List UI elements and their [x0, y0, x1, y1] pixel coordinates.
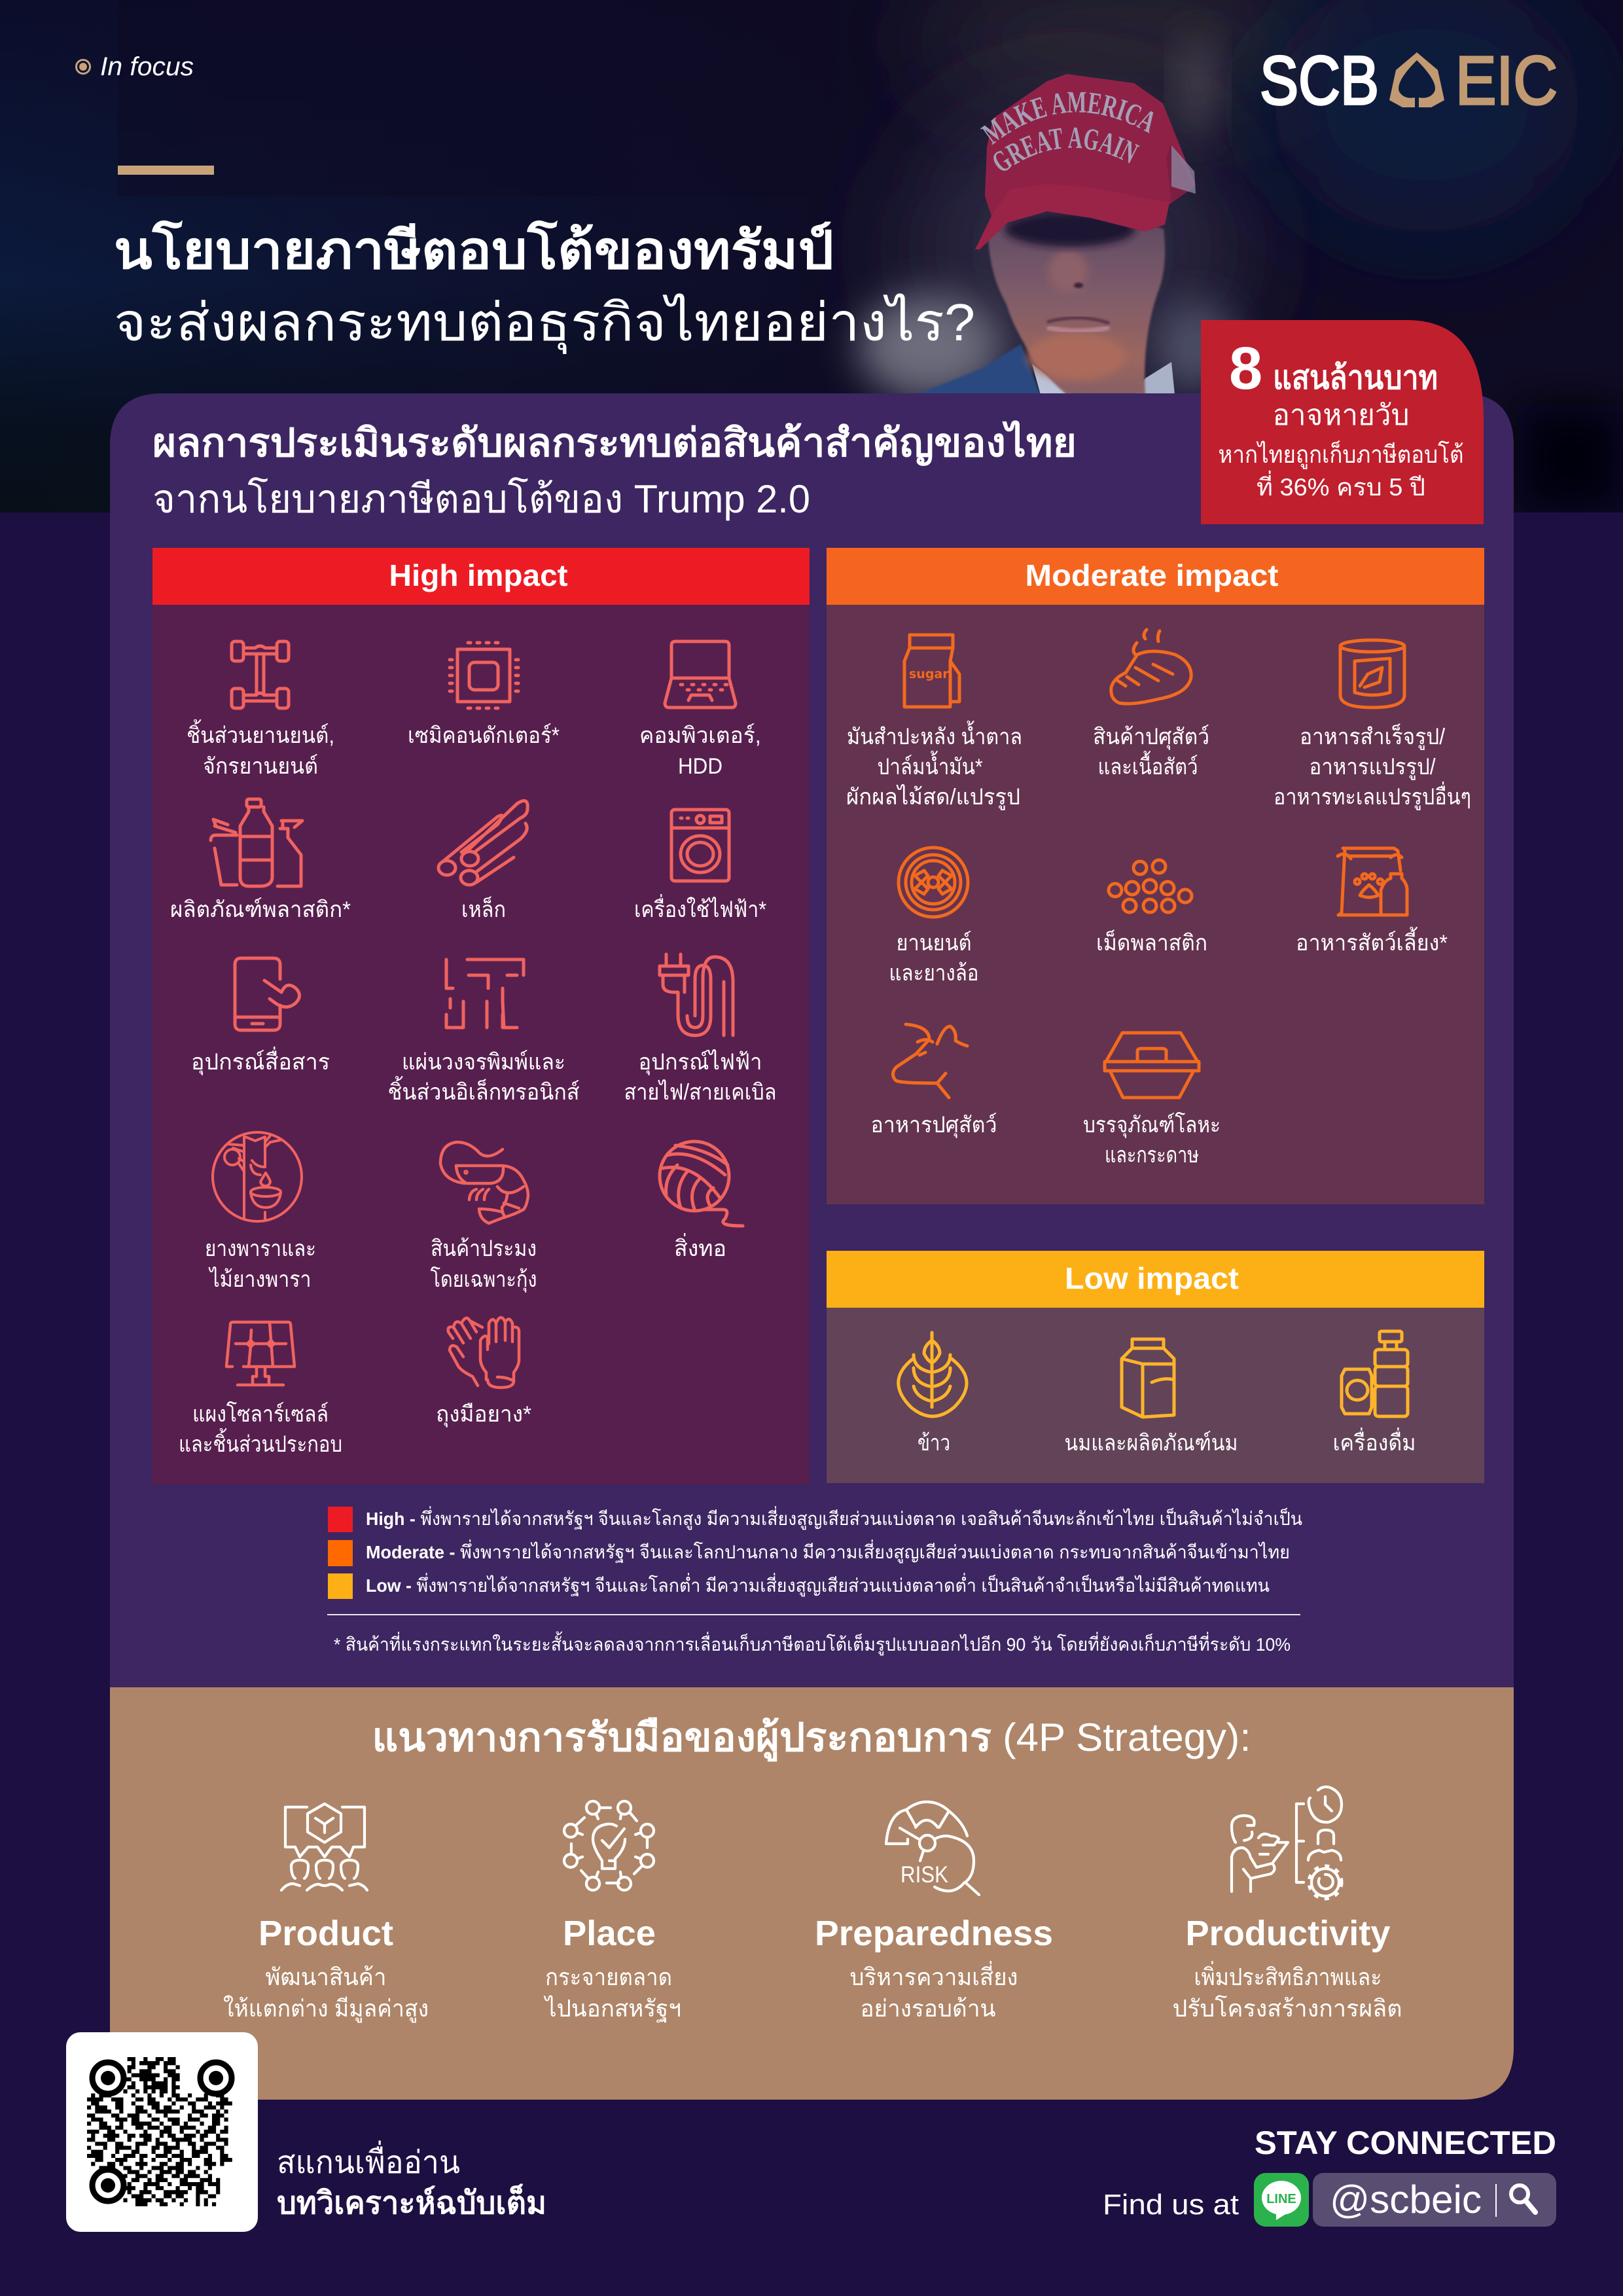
label: เซมิคอนดักเตอร์* — [408, 723, 560, 748]
label: แผ่นวงจรพิมพ์และ — [402, 1050, 565, 1075]
icon: steak — [1111, 630, 1191, 704]
logo: SCB EIC: EIC — [1455, 43, 1558, 119]
icon: steel pipes — [438, 801, 527, 885]
label: สินค้าปศุสัตว์ — [1093, 725, 1209, 750]
label — [889, 931, 979, 986]
title: จะส่งผลกระทบต่อธุรกิจไทยอย่างไร? — [114, 293, 975, 354]
label: Productivity: Productivity — [1186, 1914, 1390, 1953]
icon: beverages — [1342, 1331, 1408, 1416]
label: มันสำปะหลัง น้ำตาล — [847, 721, 1022, 749]
icon: milk carton — [1122, 1339, 1174, 1417]
legend swatch: moderate — [328, 1540, 353, 1566]
label: อาหารสำเร็จรูป/ — [1300, 723, 1446, 750]
icon: sugar bag: sugar — [909, 667, 949, 681]
panel: Low impact — [827, 1251, 1484, 1483]
header: Low impact — [827, 1251, 1484, 1308]
legend — [328, 1506, 1302, 1599]
icon: rubber tree — [213, 1132, 302, 1221]
label — [187, 719, 334, 779]
title: นโยบายภาษีตอบโต้ของทรัมป์ — [114, 219, 834, 279]
label — [205, 1236, 316, 1292]
callout: 8 แสนล้านบาท: ที่ 36% ครบ 5 ปี — [1257, 470, 1425, 501]
header: Low impact: Low impact — [1065, 1261, 1239, 1295]
label: ข้าว — [918, 1431, 950, 1456]
icon: canned food — [1340, 640, 1404, 708]
cap — [975, 74, 1196, 249]
header: High impact: High impact — [389, 558, 568, 592]
callout: 8 แสนล้านบาท: อาจหายวับ — [1272, 399, 1410, 431]
label: Preparedness: อย่างรอบด้าน — [860, 1995, 996, 2022]
label: อาหารสัตว์เลี้ยง* — [1296, 927, 1448, 956]
header: Moderate impact — [827, 548, 1484, 605]
label: สิ่งทอ — [674, 1233, 726, 1261]
icon: rice grain — [899, 1333, 967, 1416]
label: อุปกรณ์สื่อสาร — [191, 1047, 330, 1075]
label — [1093, 725, 1209, 780]
label: Place: Place — [563, 1914, 656, 1953]
legend swatch: high — [328, 1507, 353, 1532]
label: จักรยานยนต์ — [203, 754, 318, 779]
label: ชิ้นส่วนอิเล็กทรอนิกส์ — [387, 1076, 580, 1105]
icon: product — [281, 1804, 367, 1890]
label: Product: พัฒนาสินค้า — [266, 1964, 386, 1990]
label: Productivity: เพิ่มประสิทธิภาพและ — [1194, 1961, 1382, 1990]
legend text: high: High - พึ่งพารายได้จากสหรัฐฯ จีนและโลกสูง มีความเสี่ยงสูญเสียส่วนแบ่งตลาด เจอสินค้าจีนทะลักเข้าไทย เป็นสินค้าไม่จำเป็น — [366, 1506, 1302, 1530]
label — [179, 1401, 342, 1457]
label: และยางล้อ — [889, 961, 979, 986]
panel heading: จากนโยบายภาษีตอบโต้ของ Trump 2.0 — [152, 476, 810, 521]
icon: plastic products — [211, 799, 302, 886]
label: คอมพิวเตอร์, — [639, 723, 761, 748]
label — [1083, 1112, 1221, 1168]
label: Productivity: ปรับโครงสร้างการผลิต — [1173, 1995, 1402, 2022]
text: scan prompt: บทวิเคราะห์ฉบับเต็ม — [277, 2183, 546, 2221]
heading: 4P strategy: แนวทางการรับมือของผู้ประกอบการ (4P Strategy): — [372, 1715, 1251, 1762]
panel: High impact — [152, 548, 810, 1484]
text: scan prompt — [277, 2140, 546, 2221]
text: stay connected: STAY CONNECTED — [1255, 2125, 1556, 2161]
handle: @scbeic — [1313, 2173, 1556, 2227]
label: HDD — [678, 754, 722, 779]
handle: @scbeic: @scbeic — [1330, 2178, 1482, 2221]
label: อุปกรณ์ไฟฟ้า — [639, 1049, 762, 1075]
icon: semiconductor chip — [450, 643, 518, 708]
title — [114, 219, 975, 354]
label — [846, 721, 1022, 810]
icon: car chassis — [232, 641, 289, 708]
label: Place: ไปนอกสหรัฐฯ — [543, 1995, 681, 2023]
icon: preparedness: RISK — [901, 1862, 948, 1888]
panel: purple main — [110, 393, 1514, 1702]
label: Product: Product — [259, 1914, 393, 1953]
callout: 8 แสนล้านบาท: หากไทยถูกเก็บภาษีตอบโต้ — [1219, 439, 1463, 469]
icon: yarn ball — [660, 1141, 743, 1226]
legend text: low: Low - พึ่งพารายได้จากสหรัฐฯ จีนและโลกต่ำ มีความเสี่ยงสูญเสียส่วนแบ่งตลาดต่ำ เป็นสินค้าจำเป็นหรือไม่มีสินค้าทดแทน — [366, 1573, 1270, 1597]
icon: place — [564, 1801, 654, 1890]
label: เครื่องดื่ม — [1332, 1427, 1416, 1456]
label — [387, 1050, 580, 1105]
label: และกระดาษ — [1105, 1143, 1199, 1168]
label: Preparedness — [815, 1914, 1053, 2022]
panel heading: ผลการประเมินระดับผลกระทบต่อสินค้าสำคัญของไทย — [152, 420, 1077, 466]
label: Place: กระจายตลาด — [545, 1964, 672, 1990]
label: ปาล์มน้ำมัน* — [877, 751, 983, 780]
panel heading — [152, 420, 1077, 521]
callout: 8 แสนล้านบาท: แสนล้านบาท — [1273, 359, 1438, 396]
label: Place — [543, 1914, 681, 2023]
icon: plug and cable — [660, 954, 733, 1035]
face — [988, 212, 1165, 395]
label: และชิ้นส่วนประกอบ — [179, 1428, 342, 1457]
label: ผักผลไม้สด/แปรรูป — [846, 784, 1020, 810]
label: โดยเฉพาะกุ้ง — [431, 1266, 537, 1293]
label: ผลิตภัณฑ์พลาสติก* — [170, 897, 351, 922]
text: scan prompt: สแกนเพื่ออ่าน — [277, 2140, 460, 2180]
icon: circuit board traces — [446, 960, 524, 1028]
label: ชิ้นส่วนยานยนต์, — [187, 719, 334, 748]
icon: washing machine — [671, 810, 729, 881]
icon: solar panel — [226, 1322, 294, 1385]
icon: LINE — [1254, 2173, 1309, 2227]
icon: car tire — [899, 848, 968, 917]
callout: 8 แสนล้านบาท: 8 — [1229, 335, 1262, 402]
label: แผงโซลาร์เซลล์ — [192, 1401, 329, 1427]
icon: sugar bag — [904, 635, 959, 707]
label — [1274, 723, 1471, 810]
label: สายไฟ/สายเคเบิล — [624, 1079, 776, 1105]
icon: laptop — [665, 641, 736, 708]
label: สินค้าประมง — [431, 1236, 537, 1261]
footnote: * สินค้าที่แรงกระแทกในระยะสั้นจะลดลงจากการเลื่อนเก็บภาษีตอบโต้เต็มรูปแบบออกไปอีก 90 วัน โดยที่ยังคงเก็บภาษีที่ระดับ 10% — [334, 1631, 1291, 1656]
label: ไม้ยางพารา — [208, 1266, 312, 1292]
label: บรรจุภัณฑ์โลหะ — [1083, 1112, 1221, 1138]
cap: MAKE AMERICA — [980, 92, 1153, 145]
header: Moderate impact: Moderate impact — [1025, 558, 1279, 592]
icon: pet food — [1338, 848, 1407, 915]
icon: productivity — [1232, 1787, 1342, 1899]
icon: tablet with hand — [235, 958, 300, 1030]
header: High impact — [152, 548, 810, 605]
label: เหล็ก — [461, 896, 506, 922]
label: Product: ให้แตกต่าง มีมูลค่าสูง — [223, 1995, 429, 2023]
icon: cow head — [893, 1024, 967, 1098]
photo: Trump in MAGA cap — [0, 0, 1623, 512]
panel: Moderate impact — [827, 548, 1484, 1204]
label — [624, 1049, 776, 1105]
label: ถุงมือยาง* — [436, 1402, 531, 1427]
logo: SCB EIC — [1260, 43, 1558, 119]
cap: GREAT AGAIN — [993, 127, 1140, 171]
icon: LINE: LINE — [1266, 2192, 1296, 2206]
label: เม็ดพลาสติก — [1096, 929, 1207, 956]
section label: In focus: In focus — [100, 52, 194, 81]
panel: 4P strategy — [110, 1687, 1514, 2100]
icon: plastic pellets — [1109, 860, 1192, 912]
logo: SCB EIC: SCB — [1260, 43, 1379, 119]
label: Product — [223, 1914, 429, 2023]
QR code card — [66, 2032, 258, 2232]
label — [639, 723, 761, 779]
label: Preparedness: Preparedness — [815, 1914, 1053, 1953]
label — [431, 1236, 537, 1293]
label: ยานยนต์ — [897, 931, 971, 956]
icon: metal container — [1105, 1033, 1199, 1098]
legend swatch: low — [328, 1573, 353, 1599]
icon: preparedness — [886, 1802, 979, 1895]
label: ยางพาราและ — [205, 1236, 316, 1261]
label: Productivity — [1173, 1914, 1402, 2022]
label: และเนื้อสัตว์ — [1098, 751, 1198, 780]
label: Preparedness: บริหารความเสี่ยง — [849, 1961, 1018, 1990]
icon: rubber gloves — [448, 1318, 519, 1388]
label: เครื่องใช้ไฟฟ้า* — [634, 894, 766, 922]
jacket — [916, 344, 1041, 395]
label: นมและผลิตภัณฑ์นม — [1064, 1431, 1238, 1456]
accent bar — [118, 166, 214, 175]
label: อาหารปศุสัตว์ — [870, 1113, 997, 1138]
text: find us at: Find us at — [1103, 2189, 1239, 2221]
callout: 8 แสนล้านบาท — [1201, 320, 1484, 524]
label: อาหารทะเลแปรรูปอื่นๆ — [1274, 781, 1471, 810]
icon: shrimp — [440, 1142, 528, 1223]
label: อาหารแปรรูป/ — [1309, 755, 1436, 780]
legend text: moderate: Moderate - พึ่งพารายได้จากสหรัฐฯ จีนและโลกปานกลาง มีความเสี่ยงสูญเสียส่วนแบ่งตลาด กระทบจากสินค้าจีนเข้ามาไทย — [366, 1539, 1290, 1564]
